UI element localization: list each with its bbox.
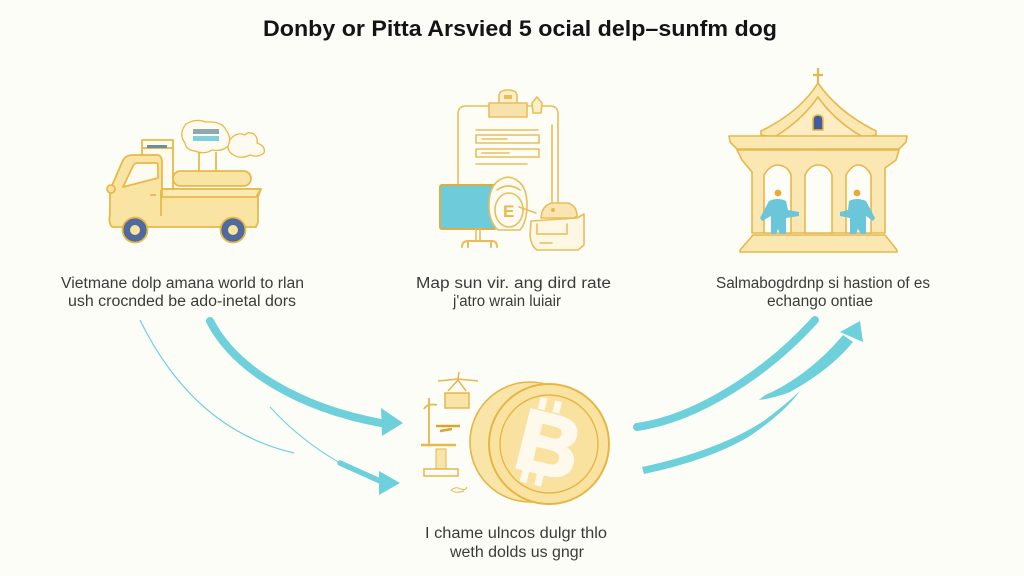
arch openings (764, 165, 791, 233)
cloud stems (199, 152, 216, 171)
form fields (476, 130, 539, 164)
frieze and columns (737, 150, 899, 233)
front coin (489, 384, 609, 504)
wheel right (220, 218, 246, 242)
icon: delivery truck (107, 120, 264, 242)
icon: clipboard, monitor and printer (440, 90, 584, 250)
caption: step two: j'atro wrain luiair (452, 293, 561, 310)
arrow: upper right with head (759, 321, 863, 400)
person left (760, 190, 799, 234)
clipboard clip (489, 90, 527, 117)
tower (436, 449, 446, 469)
caption: step one: Vietmane dolp amana world to rlan (61, 275, 304, 292)
truck roof box (142, 140, 173, 190)
round badge: E (503, 202, 514, 221)
printer (530, 203, 584, 250)
round badge (489, 177, 536, 230)
caption: step two (416, 275, 611, 310)
finial (813, 68, 823, 83)
caption: step four (425, 525, 607, 561)
title: Donby or Pitta Arsvied 5 ocial delp–sunfm dog (263, 16, 777, 41)
bird (436, 426, 460, 431)
clipboard board (458, 106, 558, 205)
caption: step one (61, 275, 304, 310)
arrow: lower right taper (642, 391, 800, 474)
door line and mirror (150, 190, 161, 216)
hexagon tag (532, 97, 542, 113)
cargo bun (173, 171, 251, 186)
caption: step three (716, 275, 930, 310)
temple base (740, 235, 897, 252)
arrow: large left curve (210, 321, 403, 436)
arrow: lower left curve (270, 407, 400, 495)
icon: small tool stand (421, 372, 478, 492)
vertical rule (551, 125, 553, 202)
inner ring (500, 395, 598, 493)
arrow: thin left curve (140, 320, 294, 453)
pole (424, 398, 437, 444)
shelf (421, 444, 456, 446)
icon: bitcoin coins (470, 382, 609, 504)
cloud sign (193, 129, 219, 141)
roof (761, 83, 876, 136)
truck body (109, 155, 261, 227)
parcel (445, 393, 469, 408)
caption: step four: weth dolds us gngr (449, 544, 584, 561)
bitcoin symbol: B (507, 391, 591, 499)
small cloud (228, 133, 264, 157)
caption: step three: echango ontiae (767, 293, 873, 310)
caption: step two: Map sun vir. ang dird rate (416, 275, 611, 292)
plinth (424, 469, 458, 476)
cab window (123, 163, 158, 187)
roof window (813, 115, 823, 130)
canopy (438, 372, 478, 391)
large cloud (182, 120, 230, 153)
wheel left (122, 218, 148, 242)
caption: step four: I chame ulncos dulgr thlo (425, 525, 607, 542)
back coin (470, 382, 590, 502)
person right (840, 190, 875, 234)
arrow: large right curve (637, 320, 815, 427)
scribble (451, 487, 467, 492)
caption: step three: Salmabogdrdnp si hastion of es (716, 275, 930, 292)
entablature (729, 136, 907, 149)
caption: step one: ush crocnded be ado-inetal dors (68, 293, 296, 310)
monitor (440, 185, 497, 247)
icon: exchange temple (729, 68, 907, 252)
bed rail (162, 189, 261, 197)
